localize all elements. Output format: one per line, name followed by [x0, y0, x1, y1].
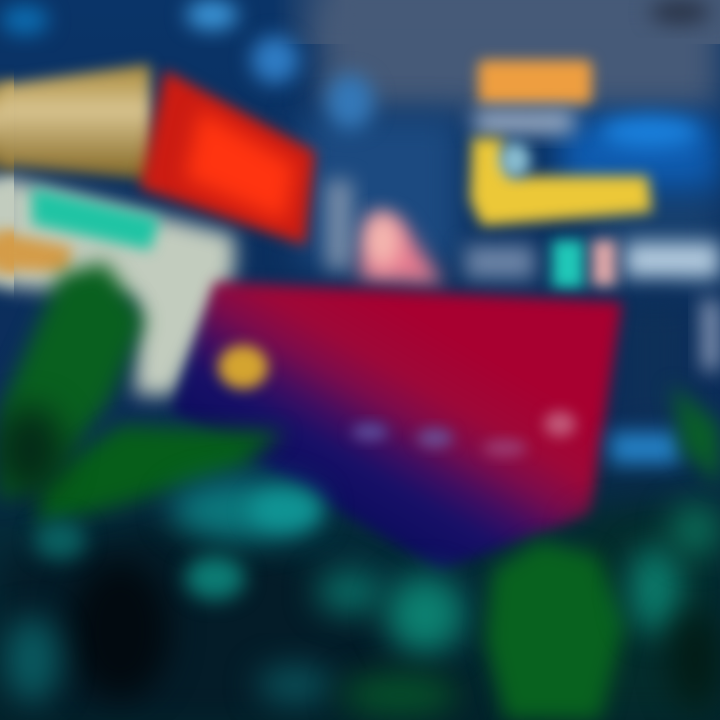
orange sign, top right: [478, 60, 592, 104]
teal strip sign: [32, 188, 160, 250]
gold sign: [0, 64, 155, 180]
credit card: [172, 282, 622, 570]
foliage, bottom: [0, 262, 720, 720]
orange strip sign: [0, 232, 72, 272]
pale band below the orange sign: [474, 110, 574, 134]
card: embossed number glow: [352, 411, 576, 457]
blue light, right of the card: [610, 432, 680, 464]
pink and teal lights behind the card: [358, 212, 616, 288]
white storefront area: [0, 175, 235, 395]
card: gold chip: [218, 345, 268, 389]
yellow sign, right: [470, 138, 652, 226]
red sign: [140, 70, 315, 245]
background lights: bokeh spots: [1, 0, 710, 148]
